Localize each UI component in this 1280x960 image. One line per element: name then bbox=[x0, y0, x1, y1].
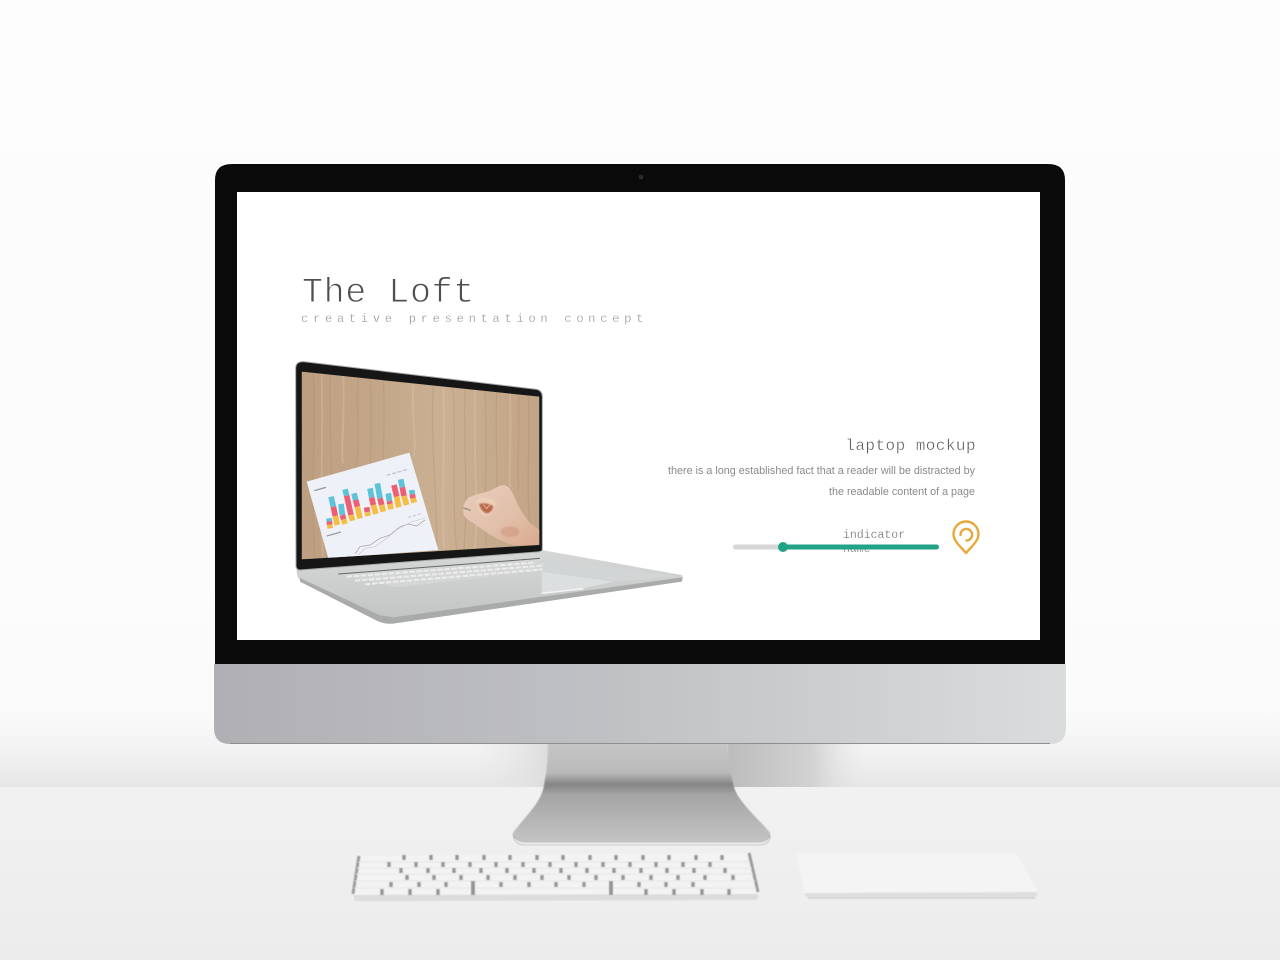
indicator label: indicator bbox=[843, 529, 905, 542]
monitor bbox=[214, 164, 1066, 744]
indicator track bbox=[733, 544, 793, 550]
icon: location pin bbox=[954, 521, 978, 553]
monitor stand bbox=[513, 743, 770, 845]
indicator knob bbox=[778, 542, 788, 552]
keyboard bbox=[352, 853, 758, 901]
body text: the readable content of a page bbox=[829, 486, 975, 498]
hand fist bbox=[463, 485, 540, 545]
wood grain bbox=[370, 378, 529, 552]
line chart bbox=[355, 518, 425, 555]
trackpad bbox=[797, 853, 1037, 898]
body text bbox=[668, 465, 975, 498]
screen bbox=[237, 192, 1040, 640]
monitor bezel bbox=[215, 164, 1065, 664]
title: The Loft bbox=[302, 273, 475, 313]
stacked bars bbox=[329, 479, 414, 528]
indicator bbox=[733, 529, 939, 556]
keyboard body bbox=[352, 853, 758, 899]
laptop screen photo: wooden surface bbox=[300, 370, 542, 562]
paper with chart bbox=[307, 453, 438, 558]
subtitle: creative presentation concept bbox=[301, 312, 648, 326]
heading: laptop mockup: laptop mockup bbox=[845, 437, 976, 455]
laptop mockup image bbox=[296, 362, 683, 624]
laptop base bbox=[297, 550, 683, 624]
webcam bbox=[639, 175, 643, 179]
monitor casing bbox=[214, 664, 1066, 744]
laptop lid bbox=[296, 362, 542, 570]
keyboard row lines bbox=[354, 862, 756, 888]
indicator label: name bbox=[843, 543, 871, 556]
keyboard key gaps bbox=[382, 855, 733, 895]
body text: there is a long established fact that a reader will be distracted by bbox=[668, 465, 975, 477]
indicator fill bbox=[783, 544, 939, 550]
